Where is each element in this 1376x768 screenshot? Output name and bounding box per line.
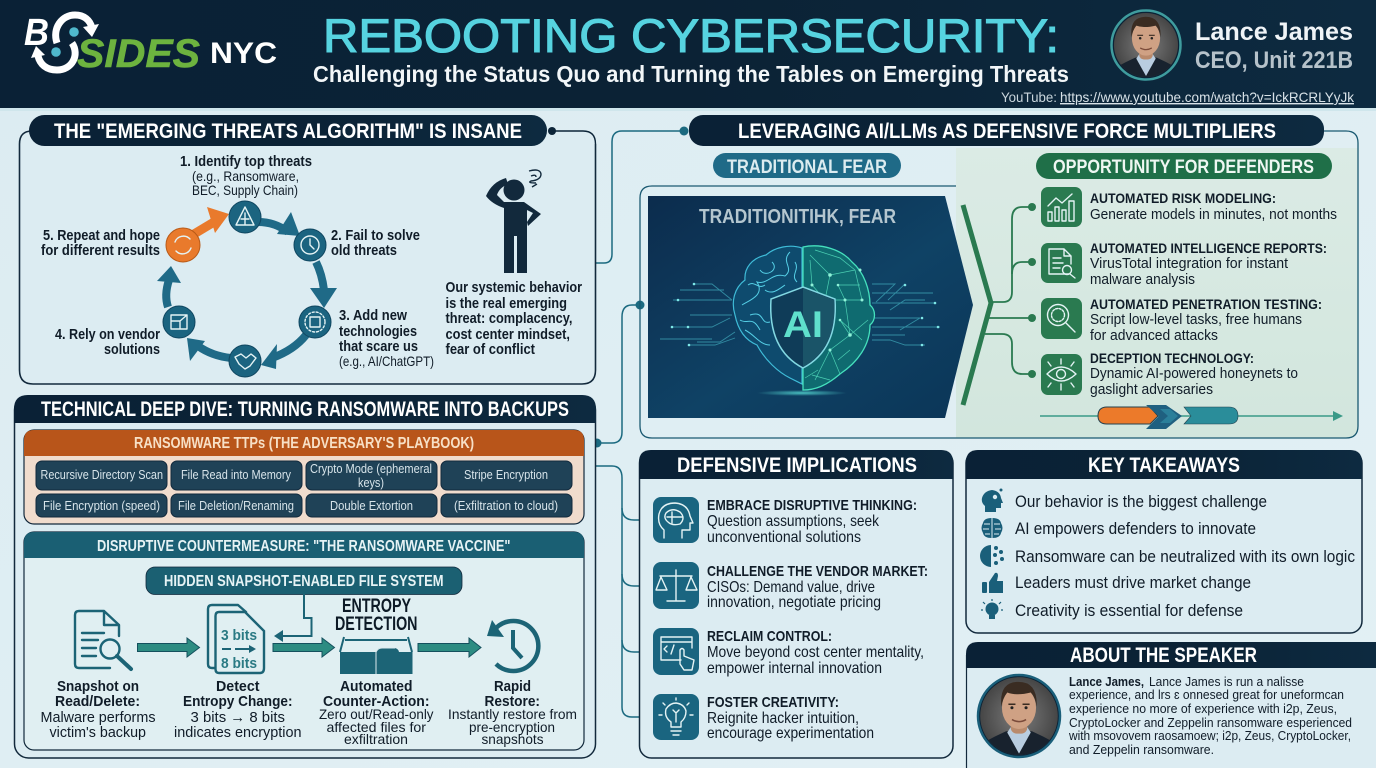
traditional fear pill: TRADITIONAL FEAR — [727, 157, 887, 178]
takeaway 5: Creativity is essential for defense — [1015, 601, 1243, 620]
step: detect: indicates encryption — [174, 724, 302, 741]
item: penetration testing — [1041, 296, 1322, 344]
deep dive heading — [14, 395, 596, 423]
speaker photo header — [1112, 10, 1180, 80]
AI heading: LEVERAGING AI/LLMs AS DEFENSIVE FORCE MULTIPLIERS — [738, 120, 1276, 143]
speaker bio: experience no more of experience with i2p, Zeus, — [1069, 701, 1337, 716]
icon: document with magnifier — [75, 611, 131, 669]
node 1: threats — [229, 201, 261, 233]
entropy detection label: ENTROPY — [342, 596, 411, 617]
TTP chips row 1: keys) — [358, 475, 384, 490]
speaker name: Lance James — [1195, 18, 1353, 46]
opportunity pill: OPPORTUNITY FOR DEFENDERS — [1053, 157, 1314, 178]
item: foster creativity: encourage experimentation — [707, 725, 874, 742]
icon: confused person — [486, 170, 541, 273]
item: risk modeling — [1041, 187, 1337, 227]
item: disruptive thinking: EMBRACE DISRUPTIVE THINKING: — [707, 497, 917, 514]
TTP chips row 1: File Read into Memory — [181, 467, 291, 482]
systemic behavior text: is the real emerging — [446, 295, 567, 312]
step: snapshot — [40, 678, 156, 741]
item: vendor market: innovation, negotiate pricing — [707, 594, 881, 611]
deep dive heading: TECHNICAL DEEP DIVE: TURNING RANSOMWARE INTO BACKUPS — [41, 398, 569, 421]
item: vendor market: CISOs: Demand value, drive — [707, 579, 875, 596]
item: reclaim control: empower internal innovation — [707, 660, 882, 677]
item: foster creativity: FOSTER CREATIVITY: — [707, 694, 839, 711]
speaker name: CEO, Unit 221B — [1195, 47, 1353, 74]
step: restore: Restore: — [484, 693, 540, 710]
chevron and branches — [963, 203, 1036, 405]
speaker bio: Lance James, — [1069, 674, 1144, 689]
item: deception technology — [1041, 350, 1298, 398]
icon: entropy documents: 3 bits — [221, 627, 257, 644]
logo: BSides NYC — [24, 12, 277, 76]
TTP chips row 2: File Encryption (speed) — [43, 498, 160, 513]
about heading — [966, 642, 1376, 668]
node 6: repeat orange — [166, 228, 200, 262]
entropy detection label — [335, 596, 418, 635]
speaker bio: Lance James is run a nalisse — [1149, 674, 1304, 689]
step: snapshot: Read/Delete: — [55, 693, 140, 710]
step 1 label: BEC, Supply Chain) — [192, 182, 298, 198]
TTP chips row 1: Crypto Mode (ephemeral — [310, 461, 432, 476]
step 5 label — [41, 227, 160, 259]
panel: leveraging AI — [640, 115, 1358, 438]
item: foster creativity — [653, 694, 874, 742]
item: reclaim control: Move beyond cost center mentality, — [707, 644, 924, 661]
TTP chips row 1: Stripe Encryption — [464, 467, 548, 482]
takeaway 1 — [982, 488, 1267, 512]
TTP chips row 2: Double Extortion — [330, 498, 413, 513]
step: restore: snapshots — [482, 731, 544, 747]
arrow 2 — [273, 638, 334, 657]
panel: key takeaways — [966, 450, 1362, 633]
step: restore: Instantly restore from — [448, 706, 577, 722]
step 2 label: 2. Fail to solve — [331, 227, 420, 244]
speaker bio: with msovovem raosamoew; i2p, Zeus, CryptoLocker, — [1068, 728, 1351, 743]
ransomware vaccine box — [24, 532, 584, 750]
panel: about the speaker — [966, 642, 1376, 768]
AI brain image panel: AI — [783, 304, 823, 345]
item: disruptive thinking — [653, 497, 917, 546]
systemic behavior text: Our systemic behavior — [446, 279, 582, 296]
connectors between panels — [592, 126, 688, 722]
item: deception technology: DECEPTION TECHNOLOGY: — [1090, 350, 1254, 366]
step: detect — [174, 678, 302, 741]
TTPs heading: RANSOMWARE TTPs (THE ADVERSARY'S PLAYBOOK) — [134, 435, 474, 452]
takeaways heading — [966, 450, 1362, 479]
TTP chips row 1 — [36, 461, 572, 490]
about heading: ABOUT THE SPEAKER — [1070, 644, 1257, 667]
hidden file system box — [146, 567, 462, 594]
item: intelligence reports: AUTOMATED INTELLIGENCE REPORTS: — [1090, 240, 1327, 256]
item: deception technology: gaslight adversaries — [1090, 381, 1213, 398]
step 3 label: technologies — [339, 323, 417, 340]
TTP chips row 2 — [36, 494, 572, 517]
hidden file system box: HIDDEN SNAPSHOT-ENABLED FILE SYSTEM — [164, 573, 444, 590]
takeaway 4: Leaders must drive market change — [1015, 573, 1251, 592]
circuit lines — [660, 284, 940, 345]
step: counter-action: affected files for — [326, 719, 426, 735]
item: reclaim control — [653, 628, 924, 677]
speaker photo — [978, 675, 1060, 757]
shield — [771, 287, 835, 368]
step 1 label: (e.g., Ransomware, — [192, 168, 299, 184]
step: counter-action: exfiltration — [344, 731, 408, 747]
step: detect: Entropy Change: — [183, 693, 292, 710]
node 4: handshake — [229, 345, 261, 377]
step 3 label: (e.g., AI/ChatGPT) — [339, 353, 434, 369]
subtitle: Challenging the Status Quo and Turning the Tables on Emerging Threats — [313, 61, 1069, 87]
vaccine heading — [24, 532, 584, 558]
step: counter-action: Counter-Action: — [323, 693, 430, 710]
step 4 label — [55, 326, 160, 358]
progress arrow — [1040, 405, 1343, 429]
brain right — [803, 246, 874, 390]
step 1 label: 1. Identify top threats — [180, 153, 312, 170]
node 2: clock — [294, 229, 326, 261]
item: vendor market: CHALLENGE THE VENDOR MARKET: — [707, 563, 928, 580]
item: deception technology: Dynamic AI-powered honeynets to — [1090, 365, 1298, 382]
icon: entropy documents: 8 bits — [221, 655, 257, 672]
TTP chips row 1: Recursive Directory Scan — [40, 467, 163, 482]
defensive heading — [639, 450, 953, 479]
logo: BSides NYC: NYC — [210, 37, 277, 70]
panel heading: THE "EMERGING THREATS ALGORITHM" IS INSANE — [54, 120, 522, 143]
step 3 label: 3. Add new — [339, 307, 407, 324]
takeaway 2: AI empowers defenders to innovate — [1015, 519, 1256, 538]
step: restore: pre-encryption — [469, 719, 555, 735]
header band — [0, 0, 1376, 111]
cycle arrows — [157, 207, 337, 369]
icon: restore clock — [487, 620, 538, 671]
item: penetration testing: AUTOMATED PENETRATION TESTING: — [1090, 296, 1322, 312]
defensive heading: DEFENSIVE IMPLICATIONS — [677, 454, 917, 477]
speaker bio: and Zeppelin ransomware. — [1069, 742, 1214, 757]
title: REBOOTING CYBERSECURITY: — [323, 9, 1059, 62]
panel: technical deep dive — [14, 395, 596, 758]
step 4 label: 4. Rely on vendor — [55, 326, 160, 343]
youtube link: YouTube: — [1001, 89, 1057, 105]
item: penetration testing: for advanced attacks — [1090, 327, 1218, 344]
panel heading — [29, 115, 596, 146]
arrow: file system to entropy — [274, 594, 312, 642]
speaker bio: CryptoLocker and Zeppelin ransomware esperienced — [1069, 715, 1352, 730]
systemic behavior text: cost center mindset, — [446, 326, 570, 343]
brain left — [733, 246, 802, 384]
item: risk modeling: AUTOMATED RISK MODELING: — [1090, 190, 1276, 206]
TTP chips row 2: File Deletion/Renaming — [178, 498, 294, 513]
AI heading — [689, 115, 1324, 146]
step 5 label: 5. Repeat and hope — [43, 227, 160, 244]
icon: entropy documents — [208, 605, 264, 673]
logo: BSides NYC: SIDES — [77, 32, 200, 76]
AI brain image panel — [648, 196, 973, 418]
systemic behavior text: threat: complacency, — [446, 310, 572, 327]
item: reclaim control: RECLAIM CONTROL: — [707, 628, 832, 645]
takeaways heading: KEY TAKEAWAYS — [1088, 454, 1240, 477]
entropy detection label: DETECTION — [335, 614, 418, 635]
AI brain image panel: TRADITIONITIHK, FEAR — [699, 206, 896, 228]
item: intelligence reports: malware analysis — [1090, 271, 1195, 288]
step: counter-action: Automated — [340, 678, 412, 695]
youtube link: https://www.youtube.com/watch?v=IckRCRLYyJk — [1060, 89, 1355, 105]
step 1 label — [180, 153, 312, 198]
step: snapshot: Malware performs — [40, 709, 156, 726]
item: intelligence reports: VirusTotal integration for instant — [1090, 255, 1289, 272]
step 2 label: old threats — [331, 242, 397, 259]
takeaway 1: Our behavior is the biggest challenge — [1015, 492, 1267, 511]
panel: emerging threats algorithm — [20, 115, 596, 384]
step: detect: Detect — [216, 678, 260, 695]
panel: defensive implications — [639, 450, 953, 758]
step: snapshot: victim's backup — [50, 724, 146, 741]
step: restore: Rapid — [494, 678, 531, 695]
item: risk modeling: Generate models in minutes, not months — [1090, 206, 1337, 223]
item: foster creativity: Reignite hacker intuition, — [707, 710, 859, 727]
arrow 3 — [418, 638, 481, 657]
item: intelligence reports — [1041, 240, 1327, 288]
ransomware TTPs box — [24, 430, 584, 524]
step 3 label: that scare us — [339, 338, 418, 355]
speaker bio — [1068, 674, 1352, 757]
vaccine heading: DISRUPTIVE COUNTERMEASURE: "THE RANSOMWARE VACCINE" — [97, 538, 510, 555]
node 3: chip — [299, 306, 331, 338]
step 5 label: for different results — [41, 242, 160, 259]
step: restore — [448, 678, 577, 747]
arrow 1 — [138, 638, 200, 657]
item: vendor market — [653, 562, 928, 611]
speaker name — [1195, 18, 1353, 74]
systemic behavior text — [446, 279, 582, 358]
TTP chips row 2: (Exfiltration to cloud) — [454, 498, 558, 513]
logo: BSides NYC: B — [24, 12, 49, 54]
systemic behavior text: fear of conflict — [446, 341, 535, 358]
step 4 label: solutions — [104, 341, 160, 358]
step: snapshot: Snapshot on — [57, 678, 139, 695]
item: disruptive thinking: unconventional solutions — [707, 529, 861, 546]
step 3 label — [339, 307, 434, 369]
TTPs heading — [24, 430, 584, 456]
item: disruptive thinking: Question assumptions, seek — [707, 513, 880, 530]
item: penetration testing: Script low-level tasks, free humans — [1090, 311, 1302, 328]
step 2 label — [331, 227, 420, 259]
step: counter-action: Zero out/Read-only — [319, 706, 434, 722]
step: counter-action — [319, 678, 434, 747]
node 5: vendor — [163, 306, 195, 338]
speaker bio: experience, and lrs ɛ onnesed great for uneformcan — [1069, 687, 1344, 702]
icon: drive folder — [340, 637, 412, 674]
step: detect: 3 bits → 8 bits — [190, 709, 285, 726]
